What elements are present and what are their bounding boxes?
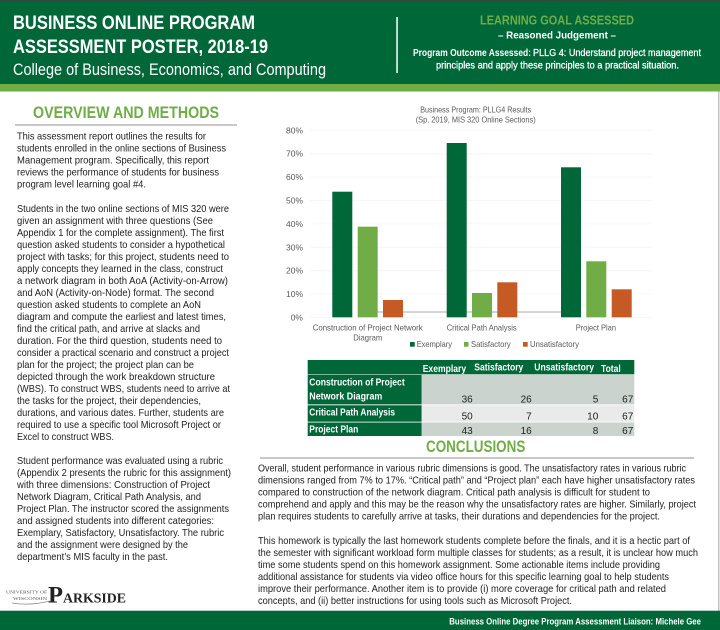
category labels: Project Plan: [576, 323, 616, 333]
text block: overview and methods: and the assignment were designed by the: [17, 539, 188, 551]
text block: overview and methods: [16, 130, 231, 563]
title: ASSESSMENT POSTER, 2018-19: [13, 36, 268, 58]
text block: overview and methods: students enrolled in the online sections of Business: [17, 142, 226, 154]
chart title: (Sp. 2019, MIS 320 Online Sections): [416, 115, 536, 125]
text block: overview and methods: program level learning goal #4.: [17, 178, 146, 190]
table row: project plan: [309, 424, 634, 437]
bars: construction of project network diagram: [332, 192, 403, 317]
table row: critical path analysis: [309, 408, 634, 422]
text block: overview and methods: a network diagram in both AoA (Activity-on-Arrow): [17, 275, 228, 287]
chart title: [416, 105, 536, 125]
y axis labels: 70%: [286, 149, 303, 159]
table row: critical path analysis: 7: [526, 412, 532, 422]
text block: overview and methods: Project Plan. The instructor scored the assignments: [17, 503, 229, 515]
table header: Exemplary: [423, 364, 467, 375]
table row: project plan: Project Plan: [309, 424, 358, 436]
text block: overview and methods: (WBS). To construct WBS, students need to arrive at: [17, 383, 230, 395]
text block: overview and methods: reviews the performance of students for business: [17, 166, 219, 178]
chart title: Business Program: PLLG4 Results: [420, 105, 531, 115]
table row: construction of project network diagram: 5: [593, 394, 599, 406]
learning goal block: Program Outcome Assessed:: [413, 48, 531, 59]
legend: [410, 339, 580, 349]
text block: overview and methods: Network Diagram, Critical Path Analysis, and: [17, 491, 201, 503]
text block: conclusions: [258, 463, 698, 607]
category labels: Diagram: [353, 333, 382, 343]
text block: overview and methods: Management program. Specifically, this report: [17, 154, 209, 166]
logo: University of Wisconsin Parkside: UNIVERSITY OF: [6, 590, 48, 594]
bars: critical path analysis: [447, 143, 517, 317]
logo: University of Wisconsin Parkside: [6, 582, 126, 608]
bars: project plan: [561, 167, 632, 317]
legend: Exemplary: [417, 339, 453, 349]
y axis labels: [286, 125, 303, 322]
text block: overview and methods: depicted through the work breakdown structure: [17, 371, 215, 383]
table row: construction of project network diagram: 36: [462, 394, 473, 406]
table row: critical path analysis: 67: [622, 412, 634, 422]
text block: overview and methods: and assigned students into different categories:: [17, 515, 214, 527]
y axis labels: 40%: [286, 219, 303, 229]
header banner: [0, 0, 720, 92]
table row: project plan: 67: [622, 426, 634, 437]
heading: overview and methods: OVERVIEW AND METHODS: [33, 103, 219, 122]
bar chart: PLLG4 results: [286, 105, 652, 349]
y axis labels: 80%: [286, 125, 303, 135]
logo: University of Wisconsin Parkside: ARKSIDE: [63, 592, 126, 606]
table row: construction of project network diagram: 26: [521, 394, 532, 406]
learning goal block: LEARNING GOAL ASSESSED: [480, 14, 634, 28]
table header: [423, 362, 621, 375]
logo: University of Wisconsin Parkside: P: [48, 582, 63, 608]
text block: conclusions: plan requires students to carefully arrive at tasks, their durations and dependencies for the project.: [258, 511, 660, 523]
text block: overview and methods: Exemplary, Satisfactory, Unsatisfactory. The rubric: [17, 527, 224, 539]
text block: overview and methods: durations, and various dates. Further, students are: [17, 407, 224, 419]
y axis labels: 20%: [286, 266, 303, 276]
title: BUSINESS ONLINE PROGRAM: [13, 12, 255, 34]
table row: construction of project network diagram: Network Diagram: [309, 391, 382, 402]
text block: conclusions: concepts, and (ii) better instructions for using tools such as Microsoft Project.: [258, 595, 572, 607]
text block: overview and methods: consider a practical scenario and construct a project: [17, 347, 229, 359]
category labels: [313, 323, 616, 343]
text block: overview and methods: with three dimensions: Construction of Project: [16, 479, 210, 491]
text block: overview and methods: Excel to construct WBS.: [17, 431, 114, 443]
heading: conclusions: CONCLUSIONS: [426, 437, 525, 456]
table row: critical path analysis: Critical Path Analysis: [309, 408, 395, 418]
text block: overview and methods: project with tasks; for this project, students need to: [17, 251, 229, 263]
table row: construction of project network diagram: 67: [622, 394, 634, 406]
table row: project plan: 43: [462, 426, 473, 437]
text block: overview and methods: question asked students to complete an AoN: [17, 299, 201, 311]
text block: overview and methods: apply concepts they learned in the class, construct: [17, 263, 223, 275]
y axis labels: 60%: [286, 172, 303, 182]
text block: overview and methods: Appendix 1 for the complete assignment). The first: [17, 227, 224, 239]
learning goal block: – Reasoned Judgement –: [498, 30, 616, 42]
text block: overview and methods: the tasks for the project, their dependencies,: [17, 395, 201, 407]
title: [13, 12, 326, 79]
text block: overview and methods: diagram and compute the earliest and latest times,: [17, 311, 226, 323]
legend: Satisfactory: [471, 339, 511, 349]
text block: conclusions: improve their performance. Another item is to provide (i) more coverage for critical path and related: [258, 583, 666, 595]
text block: overview and methods: duration. For the third question, students need to: [17, 335, 222, 347]
text block: conclusions: time some students spend on this homework assignment. Some actionable items include providing: [258, 559, 660, 571]
table header: Satisfactory: [474, 362, 524, 373]
logo: University of Wisconsin Parkside: WISCONSIN: [13, 596, 48, 601]
learning goal block: [413, 14, 701, 72]
y axis labels: 10%: [286, 289, 303, 299]
learning goal block: PLLG 4: Understand project management: [533, 48, 701, 59]
footer bar: [0, 611, 720, 630]
table row: project plan: 8: [593, 426, 599, 437]
text block: overview and methods: given an assignment with three questions (See: [17, 215, 213, 227]
y axis labels: 30%: [286, 242, 303, 252]
text block: overview and methods: plan for the project; the project plan can be: [17, 359, 194, 371]
text block: overview and methods: question asked students to consider a hypothetical: [17, 239, 225, 251]
category labels: Critical Path Analysis: [447, 323, 517, 333]
y axis labels: 50%: [286, 196, 303, 206]
table row: construction of project network diagram: [309, 377, 634, 406]
text block: overview and methods: This assessment report outlines the results for: [17, 130, 206, 142]
table row: critical path analysis: 10: [587, 412, 599, 422]
table row: construction of project network diagram: Construction of Project: [309, 377, 405, 388]
y axis labels: 0%: [291, 312, 303, 322]
text block: conclusions: compared to construction of the network diagram. Critical path analysis is difficult for student to: [258, 487, 650, 499]
text block: overview and methods: Student performance was evaluated using a rubric: [17, 455, 223, 467]
table row: project plan: 16: [521, 426, 532, 437]
text block: overview and methods: and AoN (Activity-on-Node) format. The second: [17, 287, 214, 299]
table header: Unsatisfactory: [534, 362, 594, 373]
category labels: Construction of Project Network: [313, 323, 423, 333]
text block: conclusions: additional assistance for students via video office hours for this specific learning goal to help students: [258, 571, 669, 583]
text block: overview and methods: required to use a specific tool Microsoft Project or: [17, 419, 221, 431]
title: College of Business, Economics, and Computing: [13, 60, 326, 79]
text block: overview and methods: department’s MIS faculty in the past.: [17, 551, 168, 563]
text block: overview and methods: (Appendix 2 presents the rubric for this assignment): [17, 467, 231, 479]
table row: critical path analysis: 50: [462, 412, 473, 422]
text block: overview and methods: find the critical path, and arrive at slacks and: [17, 323, 200, 335]
learning goal block: principles and apply these principles to a practical situation.: [436, 60, 679, 72]
text block: overview and methods: Students in the two online sections of MIS 320 were: [17, 203, 229, 215]
table header: Total: [601, 364, 621, 375]
data table: [308, 360, 634, 437]
legend: Unsatisfactory: [530, 339, 580, 349]
